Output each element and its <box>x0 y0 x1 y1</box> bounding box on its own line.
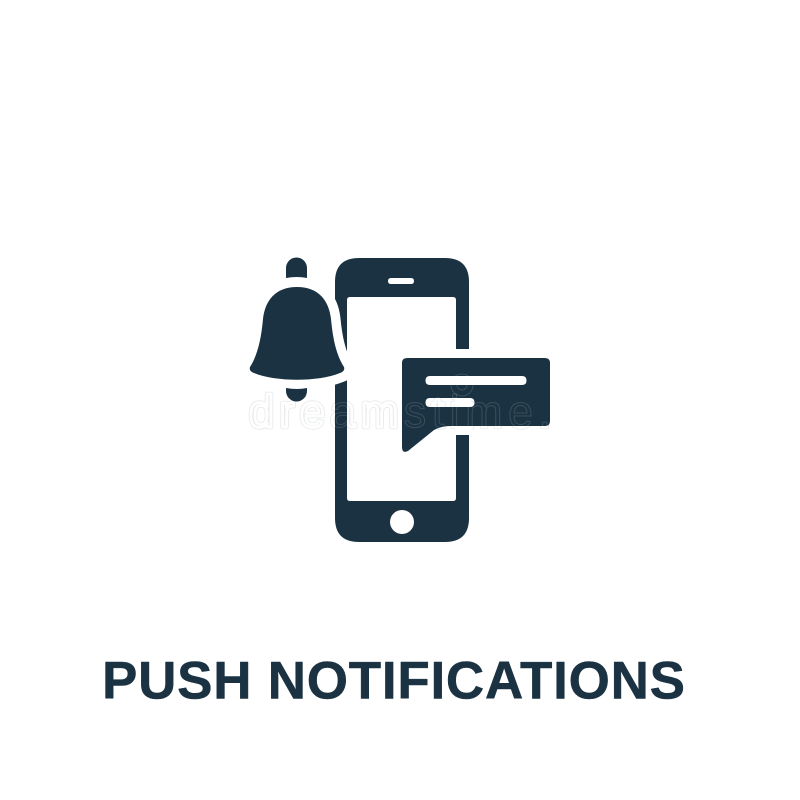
icon: smartphone with bell and message <box>250 258 550 542</box>
title: PUSH NOTIFICATIONS <box>102 652 685 710</box>
icon: bell <box>250 258 344 402</box>
icon: smartphone <box>335 258 471 542</box>
watermark overlay on dark shapes: dreamstime. <box>249 386 551 437</box>
watermark: dreamstime. <box>249 386 551 437</box>
icon: speech bubble <box>402 358 550 452</box>
watermark: dreamstime. <box>249 386 551 437</box>
